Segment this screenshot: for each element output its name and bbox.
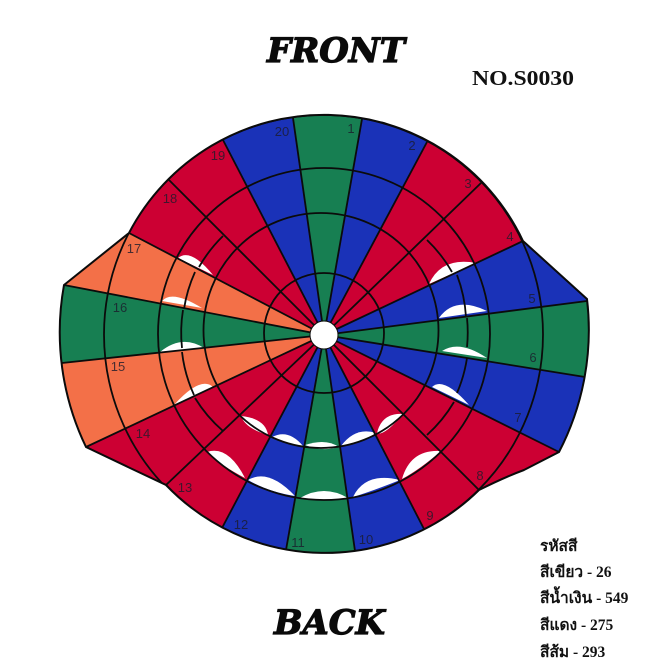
wedge 14 red (88, 342, 313, 484)
dartboard-shaped panel diagram (58, 114, 590, 554)
product number: NO.S0030 (472, 66, 574, 90)
wedge 4 red (335, 183, 521, 328)
wedge 20 blue (224, 118, 322, 322)
wedge 8 red (334, 342, 557, 488)
wedge 19 red (169, 140, 316, 324)
wedge numbers: 2 (408, 138, 416, 153)
wedge 5 blue (338, 242, 586, 332)
title: BACK: BACK (273, 603, 386, 643)
wedge numbers: 3 (464, 176, 472, 191)
wedge numbers: 12 (234, 517, 248, 532)
wedge 6 green (338, 302, 588, 376)
wedge 2 blue (327, 120, 427, 322)
wedge 16 green (60, 286, 310, 362)
wedge 1 green (294, 116, 362, 321)
wedge 9 red (332, 346, 478, 528)
wedge 12 blue (224, 348, 321, 548)
colour code legend: รหัสสี (540, 537, 578, 555)
title: FRONT: FRONT (266, 31, 408, 71)
wedge numbers: 5 (528, 291, 536, 306)
wedge numbers: 10 (359, 532, 373, 547)
wedge numbers: 20 (275, 124, 289, 139)
wedge numbers: 6 (529, 350, 537, 365)
wedge numbers: 13 (178, 480, 192, 495)
wedge numbers: 19 (211, 148, 225, 163)
wedge 7 blue (337, 338, 584, 451)
colour code legend: สีน้ำเงิน - 549 (540, 586, 629, 607)
wedge 11 green (287, 349, 354, 552)
wedge 15 orange (62, 337, 310, 446)
wedge numbers: 1 (347, 121, 355, 136)
partial inner ring segments (181, 236, 468, 435)
colour code legend (540, 537, 629, 661)
wedge numbers: 9 (426, 508, 434, 523)
wedge numbers (111, 121, 537, 550)
white lens cut-outs (160, 255, 487, 500)
wedge numbers: 8 (476, 468, 484, 483)
wedge numbers: 7 (514, 410, 522, 425)
wedge numbers: 15 (111, 359, 125, 374)
colour code legend: สีเขียว - 26 (540, 563, 612, 581)
spoke lines (62, 118, 587, 551)
wedge numbers: 17 (127, 241, 141, 256)
colour code legend: สีแดง - 275 (540, 616, 613, 634)
wedge 13 red (167, 346, 316, 526)
wedge 17 orange (66, 234, 311, 332)
wedge numbers: 16 (113, 300, 127, 315)
wedge 18 red (130, 180, 314, 328)
wedge numbers: 4 (506, 229, 514, 244)
wedge numbers: 11 (291, 535, 305, 550)
coloured wedges (60, 116, 588, 552)
wedge numbers: 18 (163, 191, 177, 206)
wedge numbers: 14 (136, 426, 150, 441)
colour code legend: สีส้ม - 293 (540, 643, 606, 661)
wedge 10 blue (326, 348, 423, 550)
outer outline (60, 115, 589, 553)
centre hub (310, 321, 338, 349)
wedge 3 red (332, 142, 481, 324)
ring lines (104, 115, 543, 554)
